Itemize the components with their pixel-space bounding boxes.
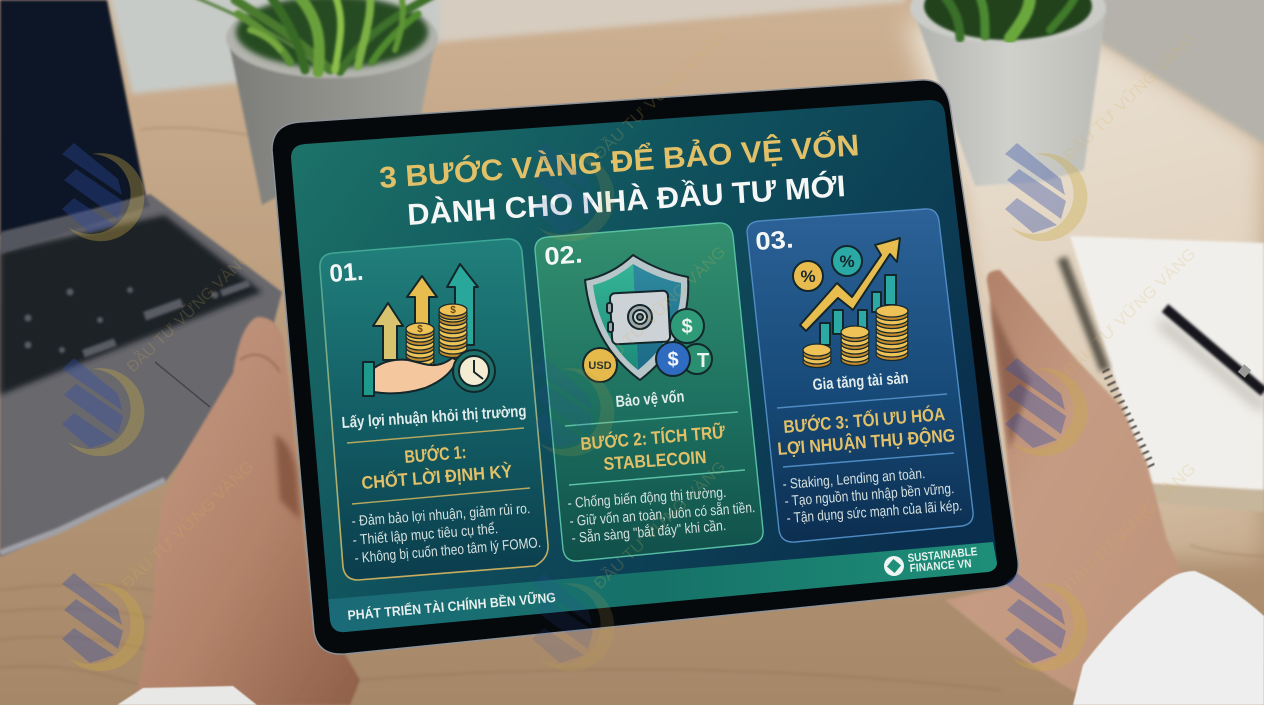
bullet list: - Đảm bảo lợi nhuận, giảm rủi ro.: [351, 501, 531, 530]
watermark text: ĐẦU TƯ VỮNG VÀNG: [1059, 28, 1199, 165]
tablet: [272, 80, 1018, 654]
watermark text: ĐẦU TƯ VỮNG VÀNG: [1059, 458, 1199, 595]
label: Bảo vệ vốn: [615, 389, 685, 411]
bullet list: - Tận dụng sức mạnh của lãi kép.: [786, 498, 963, 527]
watermark text: ĐẦU TƯ VỮNG VÀNG: [589, 26, 729, 163]
bullet list: [567, 485, 756, 547]
title: [378, 128, 860, 232]
background: notebook with spiral and pen: [1062, 236, 1264, 512]
panel: step 3: [747, 209, 973, 542]
icon: percent marks: %: [800, 267, 816, 286]
bullet list: - Sẵn sàng "bắt đáy" khi cần.: [571, 517, 727, 547]
step heading: [777, 403, 956, 459]
bullet list: - Thiết lập mục tiêu cụ thể.: [352, 521, 499, 549]
tablet body: [272, 80, 1018, 654]
brand name: SUSTAINABLE: [907, 546, 978, 565]
watermark logos off the tablet: [62, 143, 1087, 671]
bullet list: [351, 501, 542, 567]
icon: hand with coins, arrows and clock: [363, 264, 495, 396]
icon: percent marks: %: [839, 252, 855, 271]
background: left plant pot: [192, 0, 438, 205]
footer tagline: PHÁT TRIỂN TÀI CHÍNH BỀN VỮNG: [347, 590, 556, 623]
step heading: CHỐT LỜI ĐỊNH KỲ: [361, 460, 513, 493]
icon: coin symbols: USD: [588, 360, 612, 372]
icon: coin symbols: $: [681, 316, 693, 338]
bullet list: - Staking, Lending an toàn.: [782, 466, 926, 493]
bullet list: - Không bị cuốn theo tâm lý FOMO.: [354, 535, 542, 567]
step heading: STABLECOIN: [603, 447, 707, 474]
title: DÀNH CHO NHÀ ĐẦU TƯ MỚI: [406, 169, 847, 232]
icon: dollar marks on coins: $: [450, 305, 456, 316]
footer band: [320, 542, 1000, 640]
background: laptop: [0, 0, 282, 557]
step heading: [580, 421, 726, 474]
bullet list: - Chống biến động thị trường.: [567, 485, 727, 512]
label: Gia tăng tài sản: [812, 370, 909, 394]
step number 03: 03.: [754, 225, 794, 256]
bullet list: - Giữ vốn an toàn, luôn có sẵn tiền.: [569, 499, 756, 530]
title: 3 BƯỚC VÀNG ĐỂ BẢO VỆ VỐN: [378, 128, 860, 195]
watermark text: ĐẦU TƯ VỮNG VÀNG: [1059, 243, 1199, 380]
label: Lấy lợi nhuận khỏi thị trường: [341, 403, 527, 432]
icon: dollar marks on coins: $: [417, 324, 423, 335]
left shirt cuff: [117, 686, 257, 705]
watermark text: ĐẦU TƯ VỮNG VÀNG: [122, 247, 254, 376]
background: right plant pot: [910, 0, 1106, 186]
brand logo: [884, 546, 978, 576]
step heading: BƯỚC 1:: [404, 441, 467, 467]
icon: coin symbols: $: [667, 349, 679, 371]
step heading: [361, 441, 513, 493]
icon: dollar marks on coins: [417, 305, 456, 335]
watermark text: ĐẦU TƯ VỮNG VÀNG: [589, 456, 729, 593]
step number 02: 02.: [543, 240, 583, 271]
panel: step 1: [320, 239, 548, 580]
bullet list: [782, 466, 963, 527]
step heading: BƯỚC 3: TỐI ƯU HÓA: [783, 403, 946, 437]
step heading: LỢI NHUẬN THỤ ĐỘNG: [777, 424, 956, 459]
background: wall: [108, 0, 1264, 150]
brand name: FINANCE VN: [909, 558, 972, 575]
left hand: [135, 317, 360, 705]
icon: shield, safe and coins: [583, 255, 712, 382]
right hand: [945, 270, 1183, 692]
step number 01: 01.: [328, 258, 364, 288]
right shirt cuff: [1073, 571, 1264, 705]
watermark text: [117, 26, 1199, 595]
icon: percent marks: [800, 252, 855, 286]
watermark text: ĐẦU TƯ VỮNG VÀNG: [117, 456, 257, 593]
panel: step 2: [535, 223, 763, 561]
icon: coin symbols: [588, 316, 709, 372]
bullet list: - Tạo nguồn thu nhập bền vững.: [784, 481, 955, 510]
icon: growth arrow, percent badges, coins: [793, 238, 908, 368]
icon: coin symbols: T: [697, 350, 709, 372]
watermark text: ĐẦU TƯ VỮNG VÀNG: [589, 241, 729, 378]
step heading: BƯỚC 2: TÍCH TRỮ: [580, 421, 726, 454]
tablet screen: [291, 100, 997, 632]
brand name: [907, 546, 978, 575]
icon: brand mark: [884, 556, 904, 576]
watermark logos on the tablet: [532, 143, 614, 671]
